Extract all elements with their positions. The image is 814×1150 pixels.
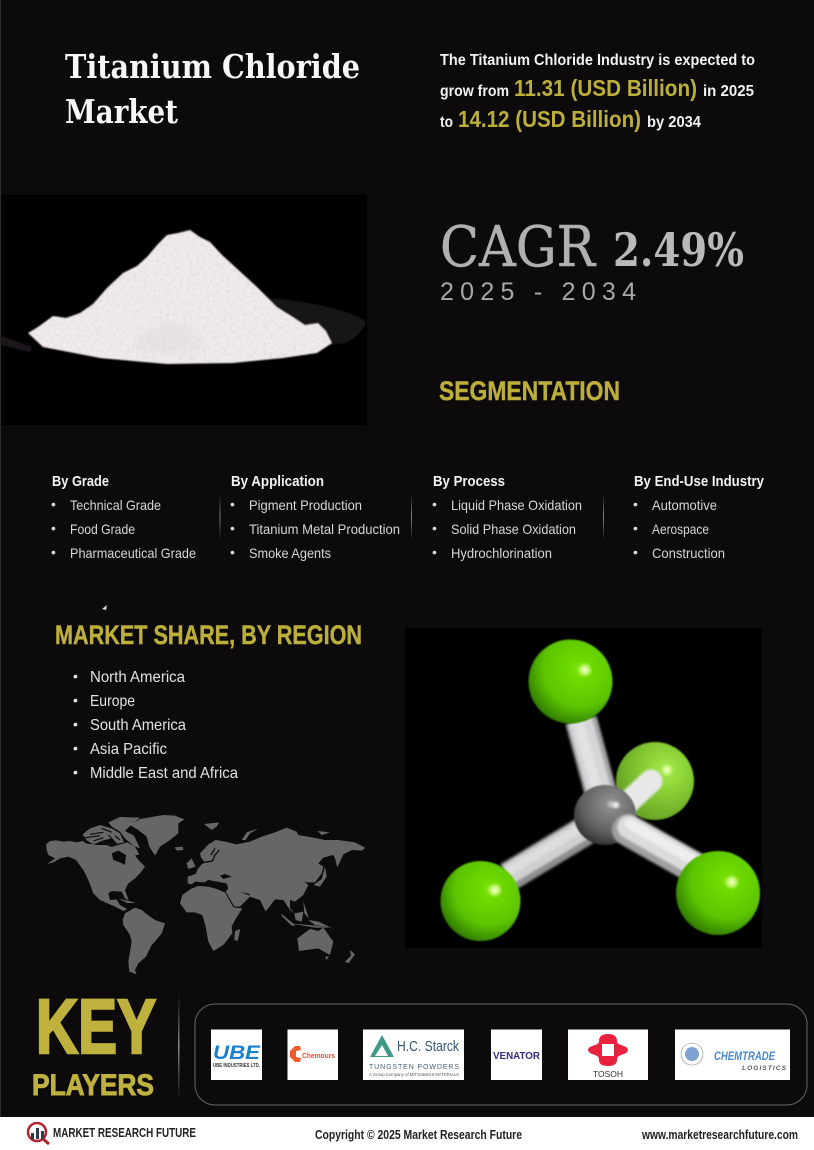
segment column: by grade: Food Grade [70, 521, 135, 537]
logo: Chemtrade Logistics: CHEMTRADE [714, 1051, 775, 1063]
segment column: by application: • [230, 544, 235, 560]
logo: Chemtrade Logistics [675, 1030, 790, 1080]
region list: South America [90, 717, 186, 734]
region list: Europe [90, 693, 135, 710]
region list: • [73, 764, 78, 780]
region list: • [73, 740, 78, 756]
logo: Tosoh: TOSOH [593, 1069, 623, 1079]
segment column: by grade: • [51, 496, 56, 512]
segment column: by end-use industry: • [633, 520, 638, 536]
world map [46, 815, 365, 974]
logo: Chemours [288, 1030, 338, 1080]
segment column: by grade: • [51, 544, 56, 560]
back chlorine atom [616, 742, 694, 820]
title: Market [65, 92, 179, 131]
segment column: by end-use industry: Automotive [652, 497, 717, 513]
segment column: by end-use industry: • [633, 496, 638, 512]
CAGR figure: 2.49% [613, 223, 744, 277]
segment column: by end-use industry: By End-Use Industry [634, 473, 765, 490]
region list: • [73, 692, 78, 708]
region list: • [73, 716, 78, 732]
segment column: by application: Smoke Agents [249, 545, 331, 561]
footer bar [0, 1117, 814, 1150]
logo: UBE: UBE [213, 1043, 262, 1064]
footer logo [28, 1123, 49, 1144]
segment column: by application: • [230, 520, 235, 536]
segment column: by process: • [432, 544, 437, 560]
footer bar: MARKET RESEARCH FUTURE [53, 1126, 196, 1140]
title: Titanium Chloride [65, 47, 360, 86]
market growth statement: The Titanium Chloride Industry is expected to [440, 52, 755, 69]
key players heading [32, 984, 156, 1102]
segment column: by process: Liquid Phase Oxidation [451, 497, 582, 513]
map: Eurasia, Africa and Oceania [180, 822, 365, 963]
segment column: by application: Titanium Metal Production [249, 521, 400, 537]
key players heading: PLAYERS [32, 1069, 154, 1102]
market growth statement: 11.31 (USD Billion) [514, 75, 697, 101]
market growth statement: by 2034 [647, 114, 701, 131]
region list: • [73, 668, 78, 684]
logo: H.C. Starck: H.C. Starck [397, 1039, 460, 1055]
logo: UBE [211, 1030, 262, 1080]
segment column: by grade: • [51, 520, 56, 536]
segment column: by process [432, 473, 582, 561]
segment column: by process: • [432, 496, 437, 512]
central titanium atom [574, 785, 636, 845]
market growth statement [440, 52, 755, 132]
market share heading: MARKET SHARE, BY REGION [55, 620, 362, 650]
market growth statement: to [440, 114, 453, 131]
region list: Asia Pacific [90, 741, 167, 758]
image: white powder pile [1, 195, 367, 425]
segment column: by grade [51, 473, 196, 561]
CAGR figure: CAGR [440, 215, 597, 280]
segment column: by end-use industry: Aerospace [652, 521, 709, 537]
market growth statement: 14.12 (USD Billion) [458, 106, 641, 132]
segment column: by end-use industry: • [633, 544, 638, 560]
map: Americas and Greenland [46, 815, 184, 974]
footer bar: Copyright © 2025 Market Research Future [315, 1128, 522, 1142]
segment column: by application [230, 473, 400, 561]
key players heading: KEY [36, 984, 156, 1070]
CAGR figure [440, 215, 744, 306]
segment column: by application: Pigment Production [249, 497, 362, 513]
logo: Venator: VENATOR [493, 1050, 540, 1062]
left chlorine atom [440, 861, 520, 941]
segment column: by grade: Pharmaceutical Grade [70, 545, 196, 561]
segment column: by end-use industry [633, 473, 765, 561]
segment column: by process: Solid Phase Oxidation [451, 521, 576, 537]
logo: H.C. Starck [363, 1030, 464, 1080]
key players panel [195, 1004, 807, 1105]
segment column: by process: • [432, 520, 437, 536]
segmentation heading: SEGMENTATION [439, 376, 620, 406]
logo: UBE: UBE INDUSTRIES LTD. [213, 1063, 261, 1069]
segment column: by grade: By Grade [52, 473, 109, 490]
CAGR figure: 2025 - 2034 [440, 278, 636, 306]
top chlorine atom [528, 640, 612, 724]
market growth statement: grow from [440, 83, 509, 100]
segment column: by process: By Process [433, 473, 505, 490]
right chlorine atom [676, 851, 760, 935]
segment column: by application: • [230, 496, 235, 512]
molecular bonds [506, 720, 651, 877]
logo: Tosoh [568, 1030, 648, 1080]
segment column: by process: Hydrochlorination [451, 545, 552, 561]
title [65, 47, 360, 131]
front bond [628, 824, 697, 868]
market growth statement: in 2025 [703, 83, 754, 100]
image: titanium chloride molecule [405, 628, 762, 948]
segment column: by application: By Application [231, 473, 324, 490]
atom highlight [611, 800, 621, 810]
region list [73, 668, 238, 782]
logo: Chemours: Chemours [302, 1051, 335, 1060]
logo: Chemtrade Logistics: LOGISTICS [742, 1065, 787, 1072]
region list: North America [90, 669, 185, 686]
logo: H.C. Starck: TUNGSTEN POWDERS [369, 1064, 459, 1071]
logo: Venator [491, 1030, 542, 1080]
logo: H.C. Starck: A Group Company of MITSUBISHI MATERIALS [369, 1072, 459, 1077]
region list: Middle East and Africa [90, 765, 238, 782]
segment column: by grade: Technical Grade [70, 497, 161, 513]
segment column: by end-use industry: Construction [652, 545, 725, 561]
